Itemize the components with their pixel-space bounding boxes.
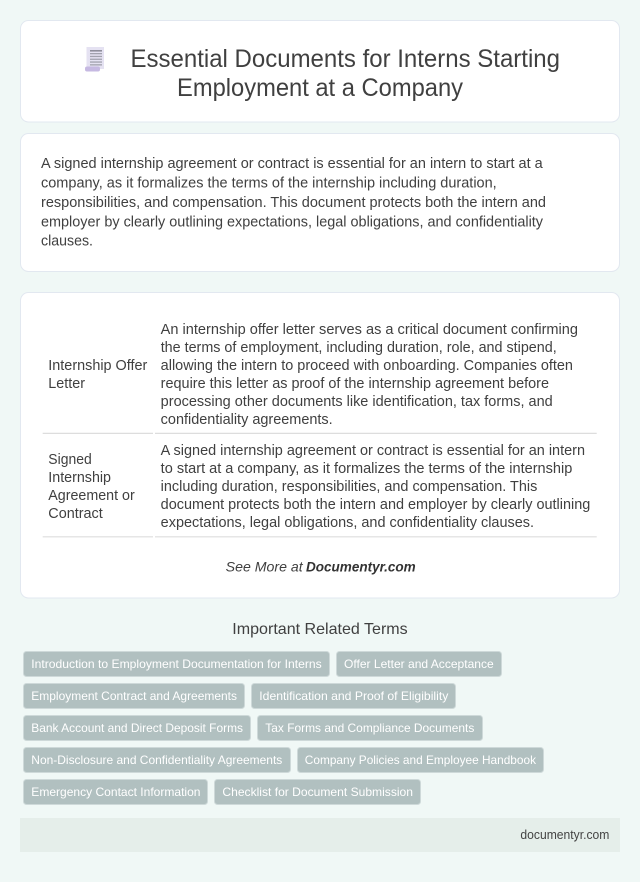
tag: Tax Forms and Compliance Documents <box>265 721 474 735</box>
row description: signed internship agreement: to start at a company, as it formalizes the terms of the internship <box>161 461 572 477</box>
icon: document scroll <box>85 47 104 72</box>
row description: signed internship agreement <box>161 443 590 531</box>
row description: signed internship agreement: A signed internship agreement or contract is essential for an intern <box>161 443 585 459</box>
tag: Bank Account and Direct Deposit Forms <box>31 721 243 735</box>
row label: signed internship agreement: Contract <box>48 506 103 522</box>
tag <box>24 684 244 708</box>
footer <box>20 818 620 852</box>
title: Essential Documents for Interns Starting <box>130 45 560 73</box>
intro text: responsibilities, and compensation. This document protects both the intern and <box>41 195 546 211</box>
see more link <box>226 559 416 575</box>
row description: internship offer letter: An internship offer letter serves as a critical document confirming <box>161 322 578 338</box>
intro text: company, as it formalizes the terms of the internship including duration, <box>41 176 497 192</box>
row label: internship offer letter: Letter <box>48 376 85 392</box>
tag <box>252 684 456 708</box>
tag <box>24 652 330 676</box>
title: Employment at a Company <box>177 74 463 102</box>
row description: internship offer letter: allowing the intern to proceed with onboarding. Companies often <box>161 358 573 374</box>
row description: signed internship agreement: including duration, responsibilities, and compensation. This <box>161 479 537 495</box>
tag list <box>24 652 544 804</box>
heading: important related terms: Important Related Terms <box>232 621 408 638</box>
see more link: See More at <box>226 559 304 575</box>
tag: Checklist for Document Submission <box>222 785 413 799</box>
panel: documents table <box>20 292 620 598</box>
row description: internship offer letter: require this letter as proof of the internship agreement before <box>161 376 549 392</box>
tag: Emergency Contact Information <box>31 785 200 799</box>
row label: internship offer letter <box>48 358 148 392</box>
intro text: employer by clearly outlining expectations, legal obligations, and confidentiality <box>41 214 544 230</box>
intro text: A signed internship agreement or contract is essential for an intern to start at a <box>41 156 543 172</box>
row description: signed internship agreement: expectations, legal obligations, and confidentiality clauses. <box>161 515 534 531</box>
row description: internship offer letter: processing other documents like identification, tax forms, and <box>161 394 553 410</box>
row description: internship offer letter: confidentiality agreements. <box>161 412 333 428</box>
row label: signed internship agreement: Agreement or <box>48 488 135 504</box>
tag: Employment Contract and Agreements <box>31 689 237 703</box>
tag: Non-Disclosure and Confidentiality Agreements <box>31 753 282 767</box>
row label: signed internship agreement <box>48 452 135 522</box>
intro text <box>41 156 546 250</box>
title <box>130 45 560 102</box>
tag: Company Policies and Employee Handbook <box>305 753 537 767</box>
intro text: clauses. <box>41 234 93 250</box>
tag <box>214 780 420 804</box>
footer: documentyr.com <box>520 828 609 842</box>
see more link: Documentyr.com <box>306 559 416 575</box>
tag <box>24 748 290 772</box>
row label: signed internship agreement: Internship <box>48 470 111 486</box>
row description: internship offer letter <box>161 322 578 428</box>
tag <box>258 716 482 740</box>
tag <box>24 780 208 804</box>
tag <box>24 716 250 740</box>
tag: Offer Letter and Acceptance <box>344 657 494 671</box>
row description: internship offer letter: the terms of employment, including duration, role, and stipend, <box>161 340 557 356</box>
panel: title card <box>20 20 620 122</box>
row description: signed internship agreement: document protects both the intern and employer by clearly outlining <box>161 497 590 513</box>
row label: internship offer letter: Internship Offer <box>48 358 148 374</box>
tag <box>336 652 502 676</box>
tag: Identification and Proof of Eligibility <box>259 689 448 703</box>
row label: signed internship agreement: Signed <box>48 452 92 468</box>
tag <box>298 748 544 772</box>
tag: Introduction to Employment Documentation for Interns <box>31 657 322 671</box>
panel: intro summary <box>20 134 620 272</box>
